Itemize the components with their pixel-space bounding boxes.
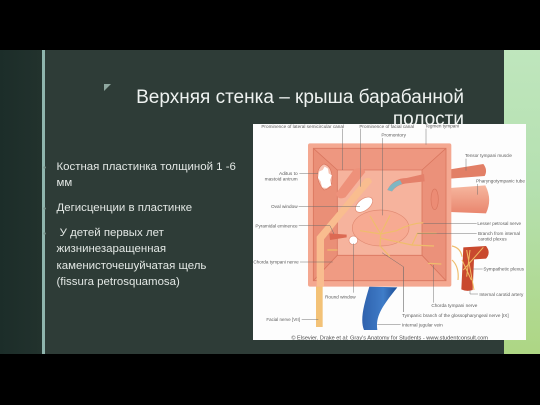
right green strip (504, 50, 540, 354)
box outer wall (308, 143, 451, 287)
title (136, 87, 464, 130)
diagram labels: Internal jugular vein (402, 322, 443, 327)
back wall (337, 170, 422, 255)
carotid artery (461, 246, 489, 291)
bullet 3: У детей первых лет (60, 227, 164, 239)
diagram labels: Facial nerve [VII] (266, 317, 300, 322)
promontory (352, 210, 409, 246)
round window (349, 236, 358, 245)
bullet marks (43, 166, 46, 236)
pharyngotympanic tube (450, 185, 489, 213)
diagram labels: Chorda tympani nerve (431, 303, 478, 308)
diagram labels: Oval window (271, 204, 299, 209)
bullet 3 (56, 227, 206, 288)
title: полости (393, 109, 464, 130)
diagram labels: Promontory (381, 132, 407, 137)
diagram labels: Pharyngotympanic tube (476, 178, 526, 183)
diagram labels: Pyramidal eminence (255, 223, 298, 228)
bullet 2: Дегисценции в пластинке (56, 202, 192, 214)
facial canal prominence (317, 178, 372, 287)
tympanic plexus nerves (327, 215, 462, 280)
diagram labels: Branch from internal (478, 231, 520, 236)
bullet 1: Костная пластинка толщиной 1 -6 (56, 161, 236, 173)
diagram labels: Aditus to (279, 171, 298, 176)
anatomical drawing (299, 129, 489, 330)
pyramidal eminence (329, 233, 347, 240)
tensor tube inside (387, 174, 425, 191)
tensor tympani tube (450, 164, 486, 179)
aditus opening (317, 164, 332, 190)
leader lines (299, 129, 483, 325)
box edges (313, 148, 446, 281)
diagram labels (253, 123, 526, 341)
slide background (0, 50, 540, 354)
jugular vein (362, 287, 397, 330)
right wall (422, 148, 446, 281)
diagram labels: Chorda tympani nerve (253, 259, 299, 264)
bottom wall (313, 255, 446, 281)
facial nerve stem (316, 285, 323, 327)
bullet 1 (56, 161, 236, 189)
tube opening (431, 189, 438, 210)
diagram labels: Sympathetic plexus (483, 266, 524, 271)
diagram labels: Tensor tympani muscle (465, 153, 513, 158)
diagram labels: Prominence of facial canal (359, 124, 414, 129)
bullet 3: (fissura petrosquamosa) (56, 276, 180, 288)
left vertical accent line (42, 50, 45, 354)
title: Верхняя стенка – крыша барабанной (136, 87, 464, 108)
diagram labels: mastoid antrum (265, 176, 298, 181)
diagram labels: Prominence of lateral semicircular canal (261, 124, 344, 129)
bullet list (43, 161, 236, 288)
left dark strip (0, 50, 42, 354)
bullet 3: каменисточешуйчатая щель (56, 260, 206, 272)
bullet 1: мм (56, 177, 72, 189)
oval window (353, 194, 375, 215)
white background (253, 124, 526, 340)
diagram labels: Tympanic branch of the glossopharyngeal nerve [IX] (402, 313, 509, 318)
left wall (313, 148, 337, 281)
bullet 3: жизнинезаращенная (56, 243, 166, 255)
diagram labels: Internal carotid artery (479, 292, 524, 297)
semicircular canal prominence (336, 168, 365, 198)
diagram labels: Round window (325, 294, 357, 299)
corner marker icon (104, 84, 111, 91)
diagram labels: carotid plexus (478, 237, 507, 242)
diagram labels: Lesser petrosal nerve (477, 221, 522, 226)
top wall (313, 148, 446, 170)
anatomy diagram panel (253, 124, 526, 340)
